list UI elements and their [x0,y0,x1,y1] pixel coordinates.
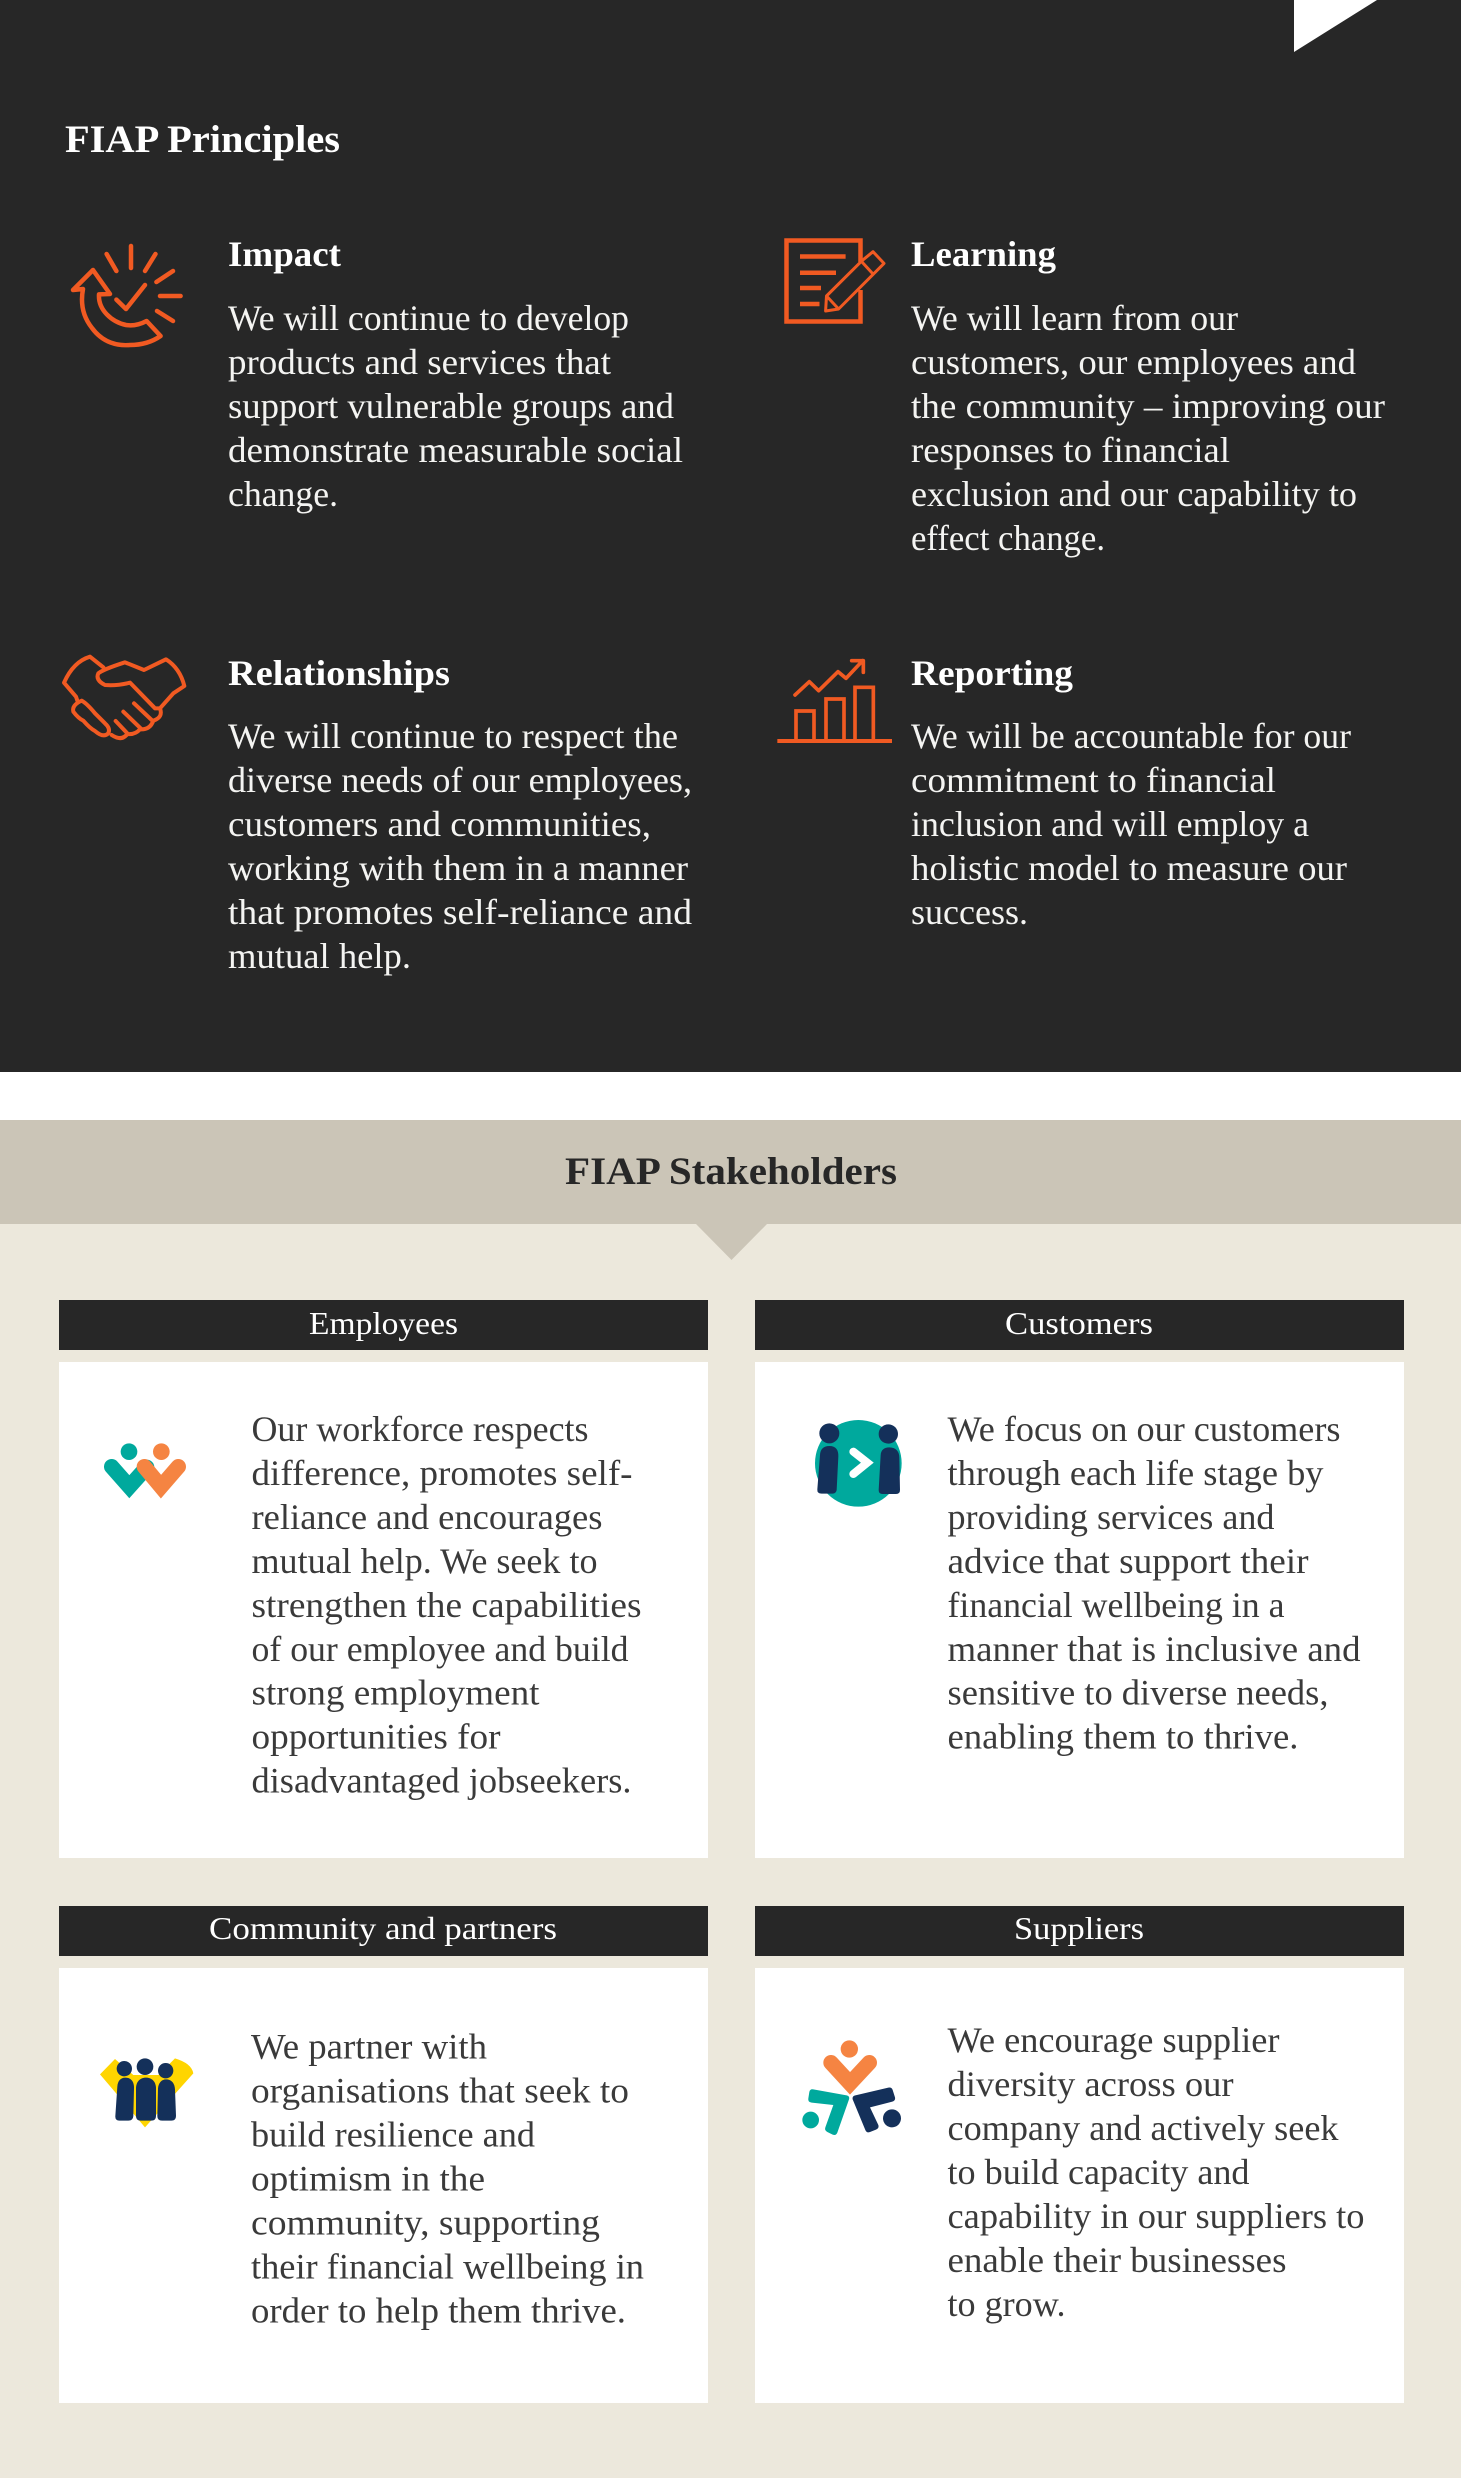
text: relationships description: working with them in a manner [228,848,688,888]
text: reporting description: inclusion and will employ a [911,804,1309,844]
text: suppliers description: company and actively seek [948,2108,1338,2148]
text: relationships description: diverse needs of our employees, [228,760,692,800]
text: customers description: We focus on our customers [948,1409,1340,1449]
icon: phone arrow with check [73,246,181,345]
text: impact description: products and services that [228,342,611,382]
card: employees [59,1300,708,1858]
icon: two figures with chevron [815,1420,902,1507]
heading: Reporting: Reporting [911,653,1073,693]
principle: relationships [64,653,692,976]
panel: FIAP stakeholders [0,1120,1461,2478]
text: learning description: effect change. [911,518,1105,558]
text: reporting description: We will be accountable for our [911,716,1351,756]
icon: three interlocked figures [802,2040,901,2135]
text: customers description: advice that support their [948,1541,1309,1581]
label: Customers: Customers [1005,1305,1153,1341]
text: customers description: through each life stage by [948,1453,1324,1493]
text: reporting description: commitment to financial [911,760,1276,800]
heading: FIAP Principles: FIAP Principles [65,118,340,161]
text: impact description [228,298,683,514]
text: impact description: support vulnerable groups and [228,386,674,426]
icon: handshake [64,657,184,738]
heading: Relationships: Relationships [228,653,450,693]
text: employees description: reliance and encourages [252,1497,602,1537]
text: learning description: responses to financial [911,430,1230,470]
text: learning description: customers, our employees and [911,342,1356,382]
text: impact description: We will continue to develop [228,298,629,338]
label: Community and partners: Community and partners [209,1910,557,1946]
text: community description: build resilience and [251,2114,535,2154]
principle: reporting [777,653,1351,932]
text: employees description: disadvantaged jobseekers. [252,1760,632,1800]
text: relationships description [228,716,692,976]
text: community description: their financial wellbeing in [251,2246,644,2286]
label: Suppliers: Suppliers [1014,1910,1144,1946]
text: employees description: opportunities for [252,1716,501,1756]
text: community description: community, supporting [251,2202,600,2242]
text: learning description: We will learn from our [911,298,1238,338]
principle: impact [73,234,683,514]
text: impact description: demonstrate measurable social [228,430,683,470]
text: customers description: enabling them to thrive. [948,1716,1298,1756]
text: employees description [252,1409,642,1800]
text: community description: order to help them thrive. [251,2290,626,2330]
text: suppliers description: to build capacity and [948,2152,1250,2192]
text: relationships description: We will continue to respect the [228,716,678,756]
text: learning description: the community – improving our [911,386,1385,426]
text: suppliers description: to grow. [948,2284,1066,2324]
text: suppliers description: We encourage supplier [948,2020,1280,2060]
icon: two linked figures [112,1443,178,1487]
text: customers description: providing services and [948,1497,1274,1537]
text: suppliers description [948,2020,1364,2324]
text: suppliers description: enable their businesses [948,2240,1286,2280]
text: employees description: of our employee and build [252,1629,628,1669]
icon: three figures on yellow heart [100,2058,193,2127]
text: reporting description: success. [911,892,1028,932]
label: Employees: Employees [309,1305,458,1341]
card: suppliers [755,1906,1404,2403]
text: impact description: change. [228,474,338,514]
text: relationships description: customers and communities, [228,804,651,844]
panel: FIAP principles [0,0,1461,1072]
text: employees description: strengthen the capabilities [252,1585,642,1625]
text: employees description: difference, promotes self- [252,1453,632,1493]
icon: document and pencil [786,240,884,322]
text: learning description: exclusion and our capability to [911,474,1357,514]
text: community description [251,2026,644,2330]
heading: Learning: Learning [911,234,1056,274]
text: reporting description: holistic model to measure our [911,848,1347,888]
text: reporting description [911,716,1351,932]
text: customers description: sensitive to diverse needs, [948,1672,1328,1712]
icon: bar chart with rising arrow [777,661,892,741]
banner: FIAP Stakeholders: FIAP Stakeholders [565,1150,897,1193]
text: employees description: strong employment [252,1672,540,1712]
text: relationships description: that promotes self-reliance and [228,892,692,932]
text: suppliers description: diversity across our [948,2064,1234,2104]
text: community description: optimism in the [251,2158,485,2198]
text: learning description [911,298,1385,558]
text: employees description: mutual help. We seek to [252,1541,598,1581]
text: customers description: financial wellbeing in a [948,1585,1285,1625]
text: employees description: Our workforce respects [252,1409,588,1449]
text: customers description [948,1409,1360,1756]
card: customers [755,1300,1404,1858]
heading: Impact: Impact [228,234,341,274]
card: community and partners [59,1906,708,2403]
text: relationships description: mutual help. [228,936,411,976]
principle: learning [786,234,1385,558]
text: customers description: manner that is inclusive and [948,1629,1360,1669]
text: suppliers description: capability in our suppliers to [948,2196,1364,2236]
white corner flag [1294,0,1377,52]
text: community description: We partner with [251,2026,487,2066]
text: community description: organisations that seek to [251,2070,629,2110]
banner: FIAP Stakeholders [0,1120,1461,1260]
